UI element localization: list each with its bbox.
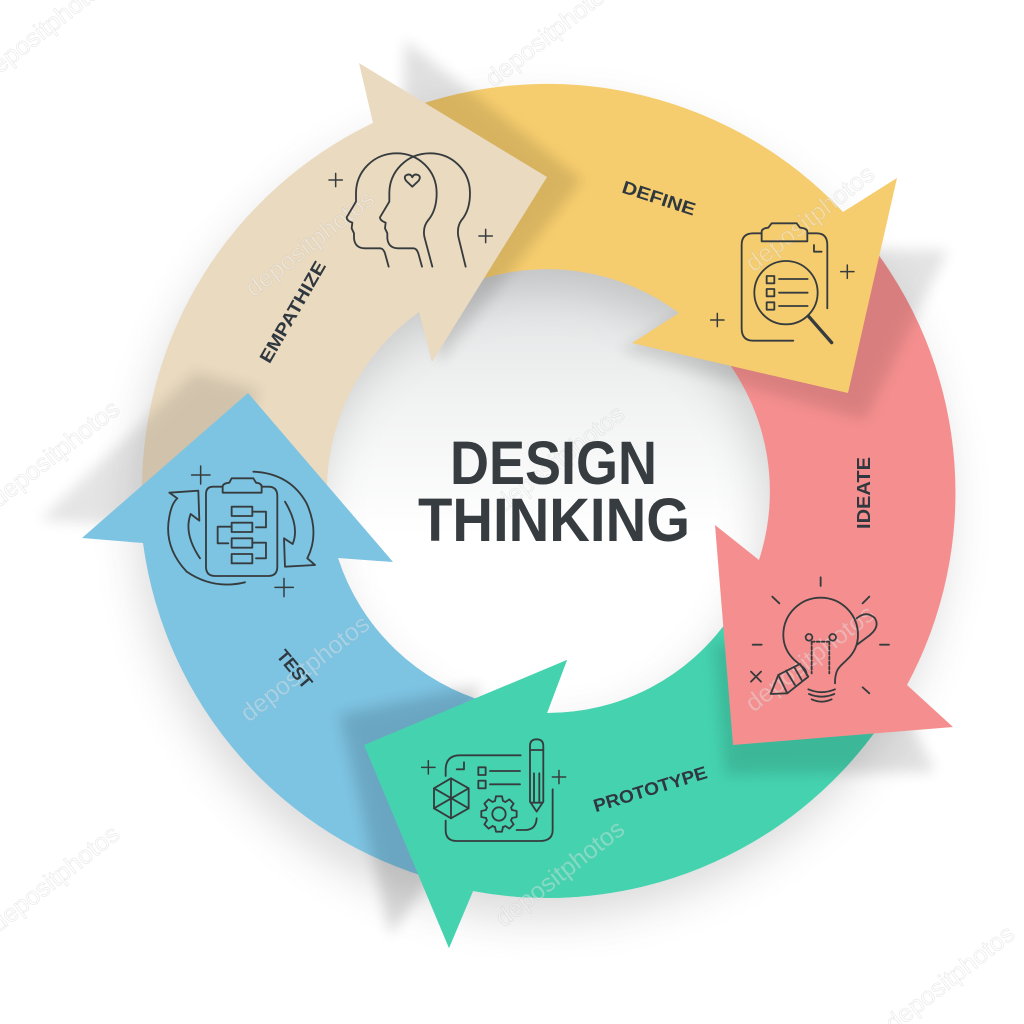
shadow: test arrow — [40, 372, 260, 530]
icon: clipboard flowchart with cycle arrows — [168, 466, 315, 597]
ring soft drop shadow — [136, 106, 948, 918]
panel: define arrow — [415, 84, 897, 393]
panel: empathize arrow — [142, 63, 547, 500]
center disc shading — [323, 265, 773, 715]
panel: prototype arrow — [364, 617, 880, 948]
icon: clipboard with magnifier — [711, 223, 854, 343]
watermarks: depositphotos — [490, 815, 630, 933]
label: prototype: PROTOTYPE — [591, 762, 710, 816]
icon: light bulb with pencil — [751, 577, 889, 702]
label: empathize: EMPATHIZE — [256, 258, 330, 366]
panel: test arrow — [82, 393, 490, 881]
title: DESIGN — [450, 429, 657, 497]
label: define: DEFINE — [620, 177, 698, 220]
shadow: empathize arrow — [400, 40, 582, 362]
watermarks: depositphotos — [235, 610, 375, 728]
shadow: ideate arrow — [713, 640, 935, 775]
panel: ideate arrow — [715, 250, 955, 745]
watermarks: depositphotos — [740, 160, 880, 278]
watermarks: depositphotos — [490, 400, 630, 518]
icon: two heads with heart — [329, 153, 492, 267]
watermarks: depositphotos — [240, 185, 380, 303]
title — [418, 429, 690, 554]
label: test: TEST — [273, 646, 316, 692]
shadow: prototype arrow head — [340, 685, 480, 935]
icon: prototype drawing with gear and pencil — [422, 739, 566, 841]
label: ideate: IDEATE — [854, 457, 874, 529]
watermarks: depositphotos — [740, 600, 880, 718]
panel: prototype arrow head — [364, 660, 580, 948]
shadow: define arrow — [620, 250, 948, 420]
title: THINKING — [418, 486, 690, 554]
